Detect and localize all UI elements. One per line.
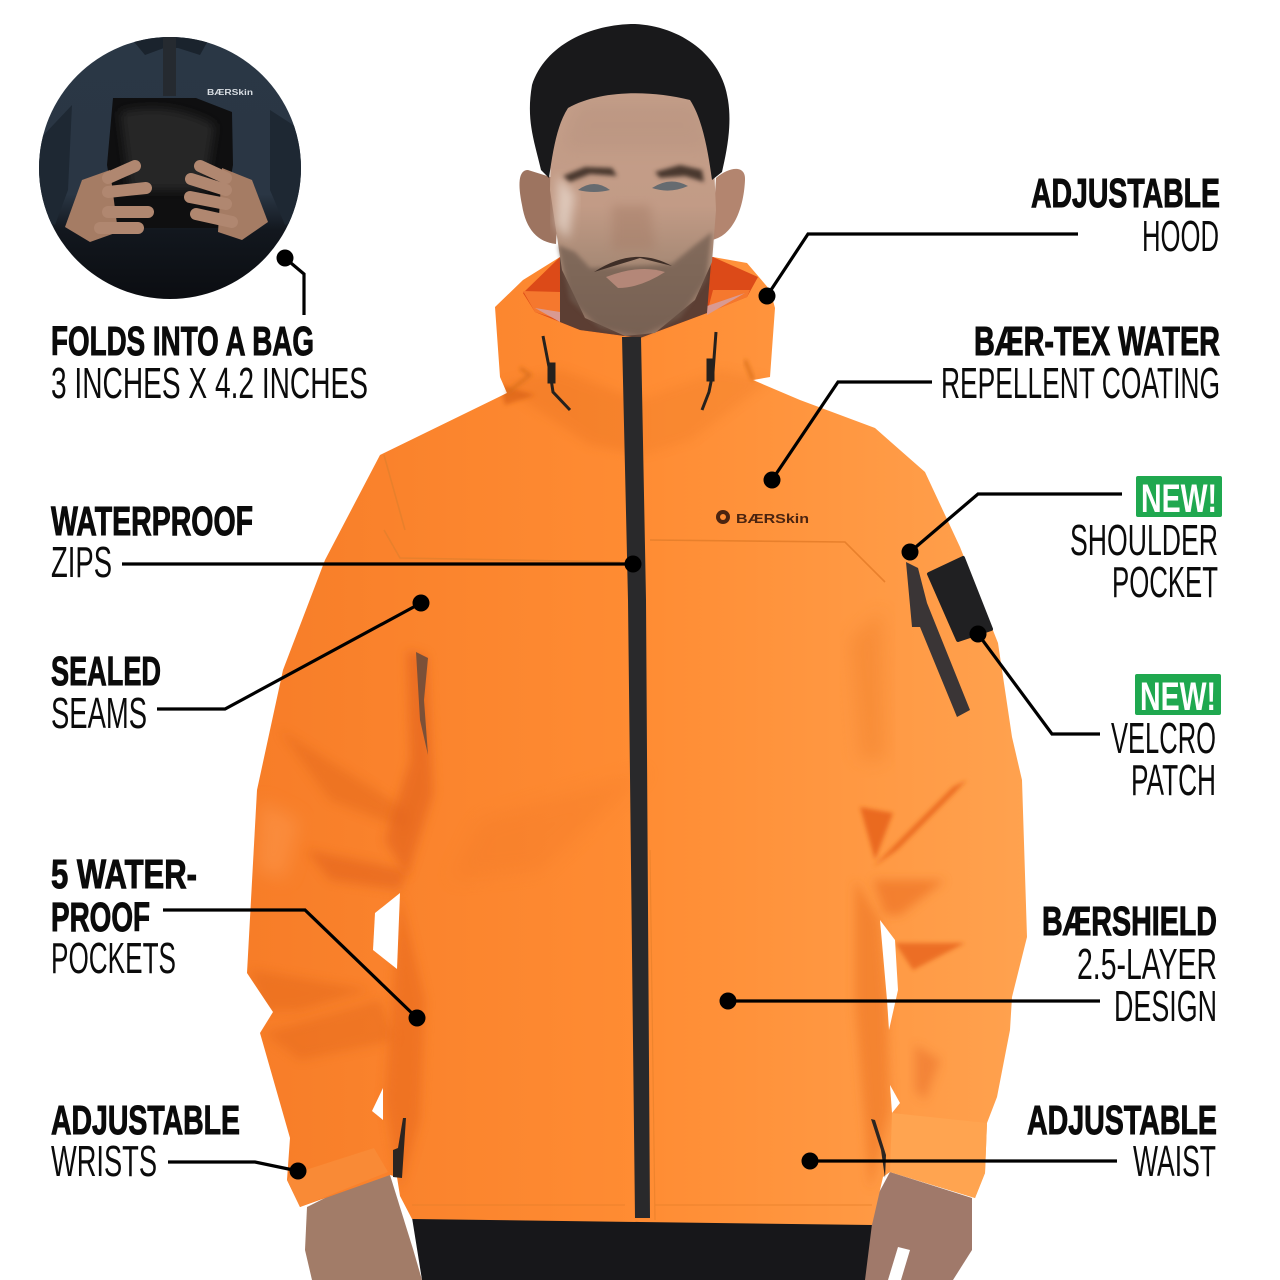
hood drawcords [543, 332, 716, 410]
callout: waterproof pockets: 5 WATER- [51, 851, 197, 897]
hood edge [507, 368, 530, 393]
left hand [65, 166, 148, 242]
callout: shoulder pocket [902, 476, 1222, 607]
yoke seams [384, 455, 885, 582]
trousers [410, 1205, 875, 1280]
right hand [190, 166, 268, 240]
logo: BÆRSkin [207, 88, 253, 97]
callout: waterproof zips: WATERPROOF [51, 498, 253, 544]
callout: adjustable wrists: ADJUSTABLE [51, 1097, 240, 1143]
jacket silhouette [247, 257, 1027, 1225]
hood inner [523, 257, 758, 338]
callout: waterproof pockets [51, 851, 426, 1026]
jacket [247, 257, 1027, 1225]
callout: water repellent coating [764, 318, 1220, 488]
face shading [556, 175, 575, 240]
pocket zips [393, 1118, 406, 1178]
logo: BÆRSkin [736, 511, 809, 526]
callout: waterproof zips: ZIPS [51, 538, 112, 587]
callout: sealed seams [51, 594, 430, 738]
callout: waterproof zips [51, 498, 642, 587]
neck and head [520, 24, 745, 338]
eyes [578, 181, 688, 192]
callout: velcro patch: NEW! [1140, 675, 1216, 719]
callout: folds into a bag: 3 INCHES X 4.2 INCHES [51, 359, 368, 408]
callout: folds into a bag [51, 250, 368, 408]
callout: adjustable waist: WAIST [1133, 1137, 1216, 1186]
hands [305, 1172, 972, 1280]
shoulder pocket zip [906, 562, 970, 717]
callout: folds into a bag: FOLDS INTO A BAG [51, 318, 314, 364]
callout: sealed seams: SEAMS [51, 689, 147, 738]
collar and sleeves [130, 37, 210, 55]
callout: adjustable wrists: WRISTS [51, 1137, 157, 1186]
callout: adjustable waist [802, 1097, 1217, 1186]
beard [558, 232, 712, 336]
callout: waterproof pockets: POCKETS [51, 934, 176, 983]
callout: baershield design [720, 898, 1217, 1031]
callout: sealed seams: SEALED [51, 648, 161, 694]
callout: waterproof pockets: PROOF [51, 894, 150, 940]
callout: adjustable hood: HOOD [1142, 212, 1219, 261]
callout: shoulder pocket: NEW! [1141, 477, 1217, 521]
logo [716, 510, 809, 526]
ears [520, 170, 560, 244]
hair [530, 24, 729, 180]
bag [107, 98, 233, 228]
callout: velcro patch: PATCH [1131, 756, 1216, 805]
gaps [373, 893, 400, 969]
callout: adjustable hood [758, 170, 1220, 304]
main zip [622, 337, 650, 1218]
callout: baershield design: DESIGN [1114, 982, 1217, 1031]
moustache and mouth [594, 257, 672, 272]
fabric shading [250, 370, 967, 1190]
neck [560, 250, 712, 338]
cuffs [287, 1148, 388, 1207]
callout: adjustable wrists [51, 1097, 306, 1186]
eyebrows [563, 165, 704, 182]
inset photo: folds into a bag [39, 37, 301, 299]
face [550, 75, 716, 336]
velcro patch [929, 558, 991, 640]
armpit slit [416, 652, 428, 755]
callout: velcro patch [970, 626, 1221, 805]
